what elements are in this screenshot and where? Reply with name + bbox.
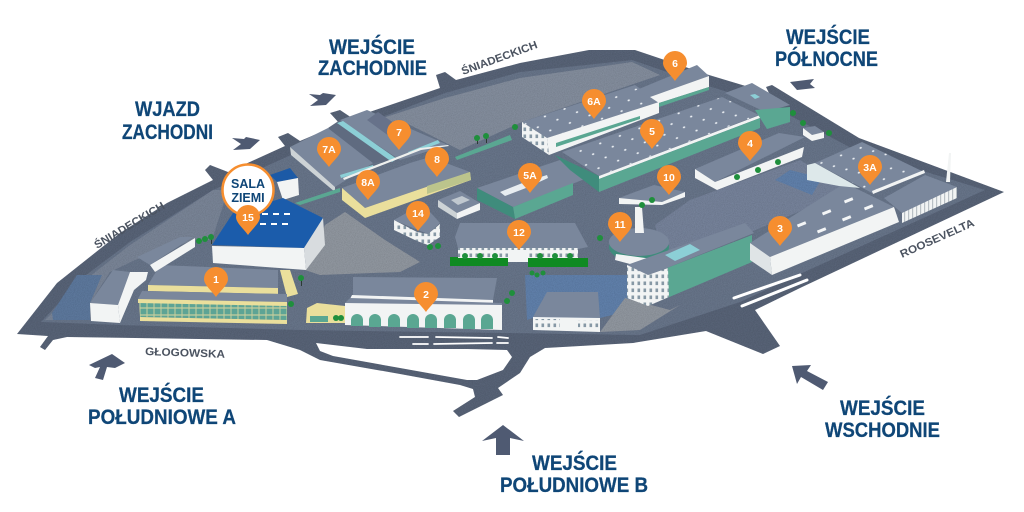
label: Wejście Południowe B: POŁUDNIOWE B — [500, 474, 648, 497]
Sala Ziemi callout — [222, 164, 274, 216]
pin 14 — [406, 201, 430, 231]
pin 3 — [768, 216, 792, 246]
building 4 — [695, 133, 805, 190]
building 12 with lawn — [450, 223, 588, 267]
small yellow building — [306, 303, 345, 323]
connecting bridges — [295, 135, 512, 205]
pin 14: 14 — [412, 208, 424, 220]
gravel west — [45, 190, 228, 320]
pin 8 — [425, 147, 449, 177]
pin 8: 8 — [434, 154, 440, 166]
road markings — [400, 275, 807, 344]
building 3 west wing — [627, 223, 754, 306]
pin 3A — [858, 155, 882, 185]
label: Wejście Północne: WEJŚCIE — [786, 25, 870, 49]
pin 10 — [657, 165, 681, 195]
pin 7A — [317, 137, 341, 167]
west white buildings — [90, 237, 195, 323]
pin 3: 3 — [777, 223, 783, 235]
pin 6: 6 — [672, 58, 678, 70]
pin 15 — [236, 205, 260, 235]
arrow: Wjazd Zachodni — [232, 137, 260, 150]
label: Wejście Południowe B: WEJŚCIE — [532, 451, 617, 475]
pin 5A — [518, 163, 542, 193]
arrow: Wejście Południowe A — [89, 354, 125, 380]
arches — [351, 314, 493, 329]
street label: Śniadeckich west: ŚNIADECKICH — [92, 199, 167, 252]
pin 2: 2 — [423, 289, 429, 301]
pin 1 — [204, 267, 228, 297]
label: Wjazd Zachodni: ZACHODNI — [122, 121, 213, 144]
label: Wejście Wschodnie: WSCHODNIE — [825, 419, 940, 442]
pin 7: 7 — [396, 127, 402, 139]
pin 7A: 7A — [322, 144, 336, 156]
label: Wejście Północne: PÓŁNOCNE — [775, 47, 878, 71]
label: Wejście Południowe B — [500, 451, 648, 497]
label: Wejście Południowe A — [88, 383, 236, 429]
pin 6A: 6A — [587, 96, 601, 108]
pin 3A: 3A — [863, 162, 877, 174]
north yard light asphalt — [345, 62, 660, 150]
central yard — [655, 160, 850, 262]
label: Wejście Wschodnie — [825, 396, 940, 442]
trees — [196, 110, 832, 321]
east striped building and chimney — [884, 153, 957, 223]
pin 1: 1 — [213, 274, 219, 286]
pin 15: 15 — [242, 212, 254, 224]
building 5A — [477, 160, 590, 219]
label: Wjazd Zachodni: WJAZD — [135, 98, 200, 121]
label: Wejście Zachodnie — [318, 35, 427, 80]
label: Wjazd Zachodni — [122, 98, 213, 144]
shaded yard west — [52, 275, 102, 320]
pin 4: 4 — [747, 138, 753, 150]
pin 6A — [582, 89, 606, 119]
street label: Roosevelta: ROOSEVELTA — [898, 217, 976, 261]
building 10 — [619, 185, 685, 205]
buildings 7A and 7 — [290, 110, 448, 192]
label: Wejście Zachodnie: ZACHODNIE — [318, 57, 427, 80]
label: Wejście Wschodnie: WEJŚCIE — [840, 396, 925, 420]
pin 6 — [663, 51, 687, 81]
small white house NE — [803, 126, 824, 141]
building 11 rotunda with chimney — [609, 207, 669, 264]
pin 5A: 5A — [523, 170, 537, 182]
pin 2 — [414, 282, 438, 312]
buildings 8A and 8 — [342, 145, 471, 218]
building 1 — [138, 265, 298, 324]
building 14 — [394, 212, 440, 245]
pin 5 — [640, 119, 664, 149]
Sala Ziemi callout: SALA — [231, 177, 265, 191]
building 3A — [807, 142, 925, 194]
pin 8A: 8A — [361, 177, 375, 189]
white island between roads — [316, 343, 512, 380]
building 2 — [345, 277, 502, 330]
shaded yard east — [775, 170, 822, 195]
arrow: Wejście Wschodnie — [792, 365, 828, 390]
small grey building — [438, 191, 480, 219]
arrow: Wejście Południowe B — [482, 425, 524, 455]
label: Wejście Zachodnie: WEJŚCIE — [329, 35, 415, 59]
gravel lot — [305, 212, 420, 275]
pin 12 — [507, 220, 531, 250]
road network and site ground — [17, 50, 1004, 417]
inner yard — [41, 60, 985, 335]
pin 4 — [738, 131, 762, 161]
label: Wejście Północne — [775, 25, 878, 71]
building 6A — [522, 85, 659, 155]
building 6 — [634, 65, 709, 107]
building 5 — [555, 83, 790, 192]
Sala Ziemi callout: ZIEMI — [231, 191, 265, 205]
pin 12: 12 — [513, 227, 525, 239]
label: Wejście Południowe A: POŁUDNIOWE A — [88, 406, 236, 429]
outer roads — [17, 50, 1004, 417]
arrow: Wejście Zachodnie — [309, 93, 336, 106]
building 15 Sala Ziemi hall — [212, 168, 325, 270]
south white building — [533, 292, 600, 332]
pin 10: 10 — [663, 172, 675, 184]
street label: Głogowska: GŁOGOWSKA — [145, 346, 225, 361]
shaded yard south — [525, 275, 633, 320]
pin 11 — [608, 212, 632, 242]
pin 7 — [387, 120, 411, 150]
street label: Śniadeckich north: ŚNIADECKICH — [460, 38, 539, 78]
gravel patches — [600, 298, 680, 332]
pin 5: 5 — [649, 126, 655, 138]
pin 8A — [356, 170, 380, 200]
label: Wejście Południowe A: WEJŚCIE — [119, 383, 204, 407]
pin 11: 11 — [614, 219, 626, 231]
arrow: Wejście Północne — [790, 79, 815, 90]
building 3 — [750, 183, 899, 275]
